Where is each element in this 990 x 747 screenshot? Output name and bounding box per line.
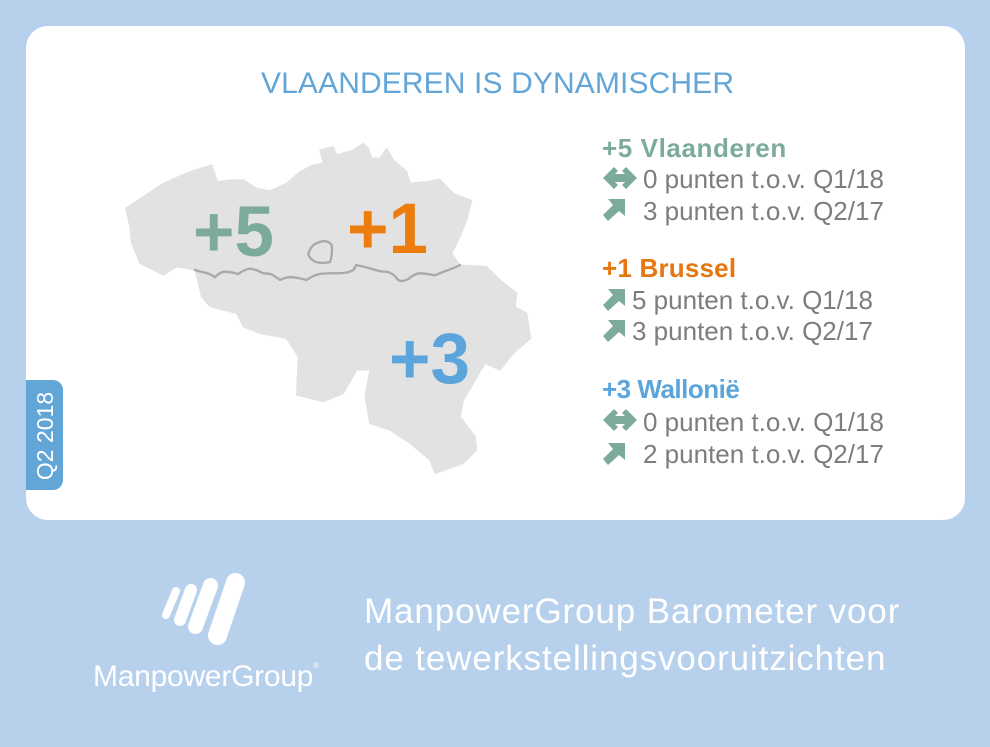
footer heading: ManpowerGroup Barometer voor bbox=[364, 592, 900, 631]
tab: period label: Q2 2018 bbox=[32, 392, 58, 480]
logo: ManpowerGroup wordmark: ® bbox=[313, 661, 319, 670]
footer heading: de tewerkstellingsvooruitzichten bbox=[364, 639, 886, 678]
panel: white card bbox=[26, 26, 965, 520]
text: Q1/18: 0 punten t.o.v. Q1/18 bbox=[643, 164, 884, 194]
text: Q2/17: 3 punten t.o.v. Q2/17 bbox=[643, 196, 884, 226]
map label: +1: +1 bbox=[347, 190, 428, 269]
map: country shape bbox=[126, 143, 531, 473]
text: Q1/18: 5 punten t.o.v. Q1/18 bbox=[632, 285, 873, 315]
logo: ManpowerGroup mark bbox=[162, 573, 245, 645]
map: regional border bbox=[195, 265, 460, 281]
icon: horizontal arrow bbox=[603, 409, 637, 431]
legend: Brussel bbox=[602, 253, 873, 346]
icon: up arrow bbox=[603, 289, 625, 311]
tab: period label bbox=[26, 380, 63, 490]
map label: +3: +3 bbox=[389, 320, 470, 399]
map: Brussels outline bbox=[308, 241, 332, 263]
text: Q2/17: 2 punten t.o.v. Q2/17 bbox=[643, 439, 884, 469]
icon: up arrow bbox=[603, 320, 625, 342]
heading: Wallonië: +3 Wallonië bbox=[602, 374, 739, 404]
title: VLAANDEREN IS DYNAMISCHER bbox=[261, 67, 734, 100]
map label: +5: +5 bbox=[193, 193, 274, 272]
logo: ManpowerGroup wordmark: ManpowerGroup bbox=[93, 660, 313, 693]
icon: up arrow bbox=[603, 199, 625, 221]
icon: up arrow bbox=[603, 443, 625, 465]
legend: Vlaanderen bbox=[602, 133, 884, 226]
heading: Vlaanderen: +5 Vlaanderen bbox=[602, 133, 787, 163]
footer heading bbox=[364, 592, 900, 678]
heading: Brussel: +1 Brussel bbox=[602, 253, 736, 283]
icon: horizontal arrow bbox=[603, 167, 637, 189]
text: Q2/17: 3 punten t.o.v. Q2/17 bbox=[632, 316, 873, 346]
text: Q1/18: 0 punten t.o.v. Q1/18 bbox=[643, 407, 884, 437]
legend: Wallonië bbox=[602, 374, 884, 469]
